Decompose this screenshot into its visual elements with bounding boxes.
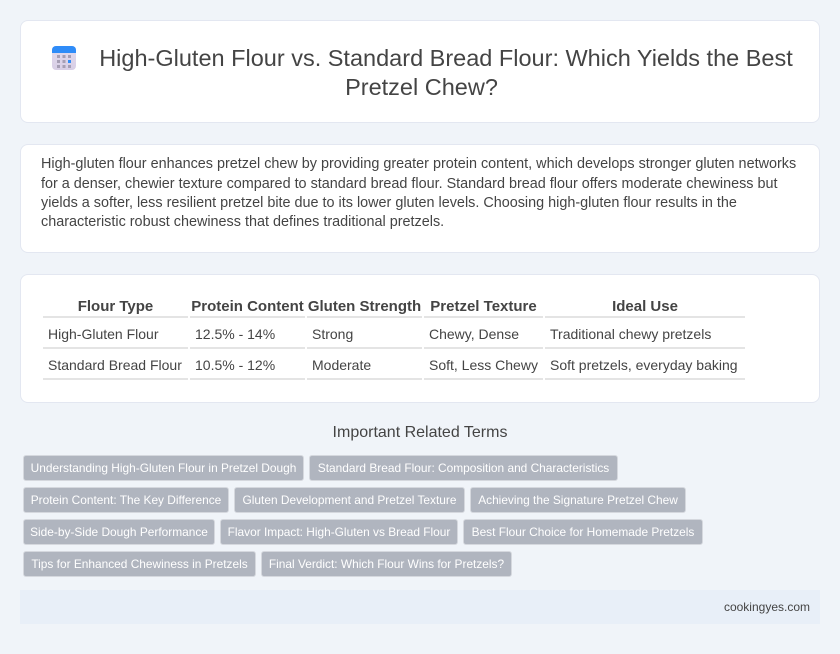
footer source: cookingyes.com <box>724 600 810 614</box>
related term tags: Tips for Enhanced Chewiness in Pretzels <box>31 557 248 571</box>
title: High-Gluten Flour vs. Standard Bread Flour: Which Yields the Best <box>99 45 793 71</box>
comparison table: Chewy, Dense <box>429 326 519 342</box>
related term tags: Best Flour Choice for Homemade Pretzels <box>472 525 694 539</box>
title <box>99 45 793 100</box>
comparison table: Traditional chewy pretzels <box>550 326 711 342</box>
comparison table: 12.5% - 14% <box>195 326 275 342</box>
intro paragraph: characteristic robust chewiness that defines traditional pretzels. <box>41 214 444 230</box>
related term tags: Achieving the Signature Pretzel Chew <box>478 493 678 507</box>
related term tags: Protein Content: The Key Difference <box>31 493 221 507</box>
comparison table: Moderate <box>312 356 371 372</box>
related term tags: Gluten Development and Pretzel Texture <box>243 493 456 507</box>
comparison table: 10.5% - 12% <box>195 356 275 372</box>
intro paragraph: for a denser, chewier texture compared to standard bread flour. Standard bread flour offers moderate chewiness but <box>41 176 777 192</box>
intro paragraph: High-gluten flour enhances pretzel chew by providing greater protein content, which develops stronger gluten networks <box>41 156 796 172</box>
intro paragraph: yields a softer, less resilient pretzel bite due to its lower gluten levels. Choosing high-gluten flour results in the <box>41 195 737 211</box>
related term tags: Final Verdict: Which Flour Wins for Pretzels? <box>269 557 504 571</box>
icon: calendar <box>52 46 76 70</box>
intro text panel <box>20 144 820 253</box>
title: Pretzel Chew? <box>345 74 498 100</box>
comparison table: Ideal Use <box>612 298 678 315</box>
intro paragraph <box>41 156 796 230</box>
comparison table: High-Gluten Flour <box>48 326 158 342</box>
comparison table: Standard Bread Flour <box>48 356 182 372</box>
related terms heading: Important Related Terms <box>333 424 507 441</box>
related term tags: Flavor Impact: High-Gluten vs Bread Flour <box>228 525 450 539</box>
comparison table: Gluten Strength <box>308 298 421 315</box>
related term tags: Understanding High-Gluten Flour in Pretzel Dough <box>31 461 296 475</box>
comparison table: Pretzel Texture <box>430 298 537 315</box>
related term tags: Standard Bread Flour: Composition and Characteristics <box>318 461 609 475</box>
header panel <box>20 20 820 123</box>
comparison table: Soft, Less Chewy <box>429 356 538 372</box>
comparison table: Soft pretzels, everyday baking <box>550 356 738 372</box>
comparison table: Protein Content <box>191 298 304 315</box>
comparison table: Flour Type <box>78 298 153 315</box>
related term tags: Side-by-Side Dough Performance <box>30 525 208 539</box>
footer bar <box>20 590 820 624</box>
table panel <box>20 274 820 403</box>
comparison table: Strong <box>312 326 353 342</box>
